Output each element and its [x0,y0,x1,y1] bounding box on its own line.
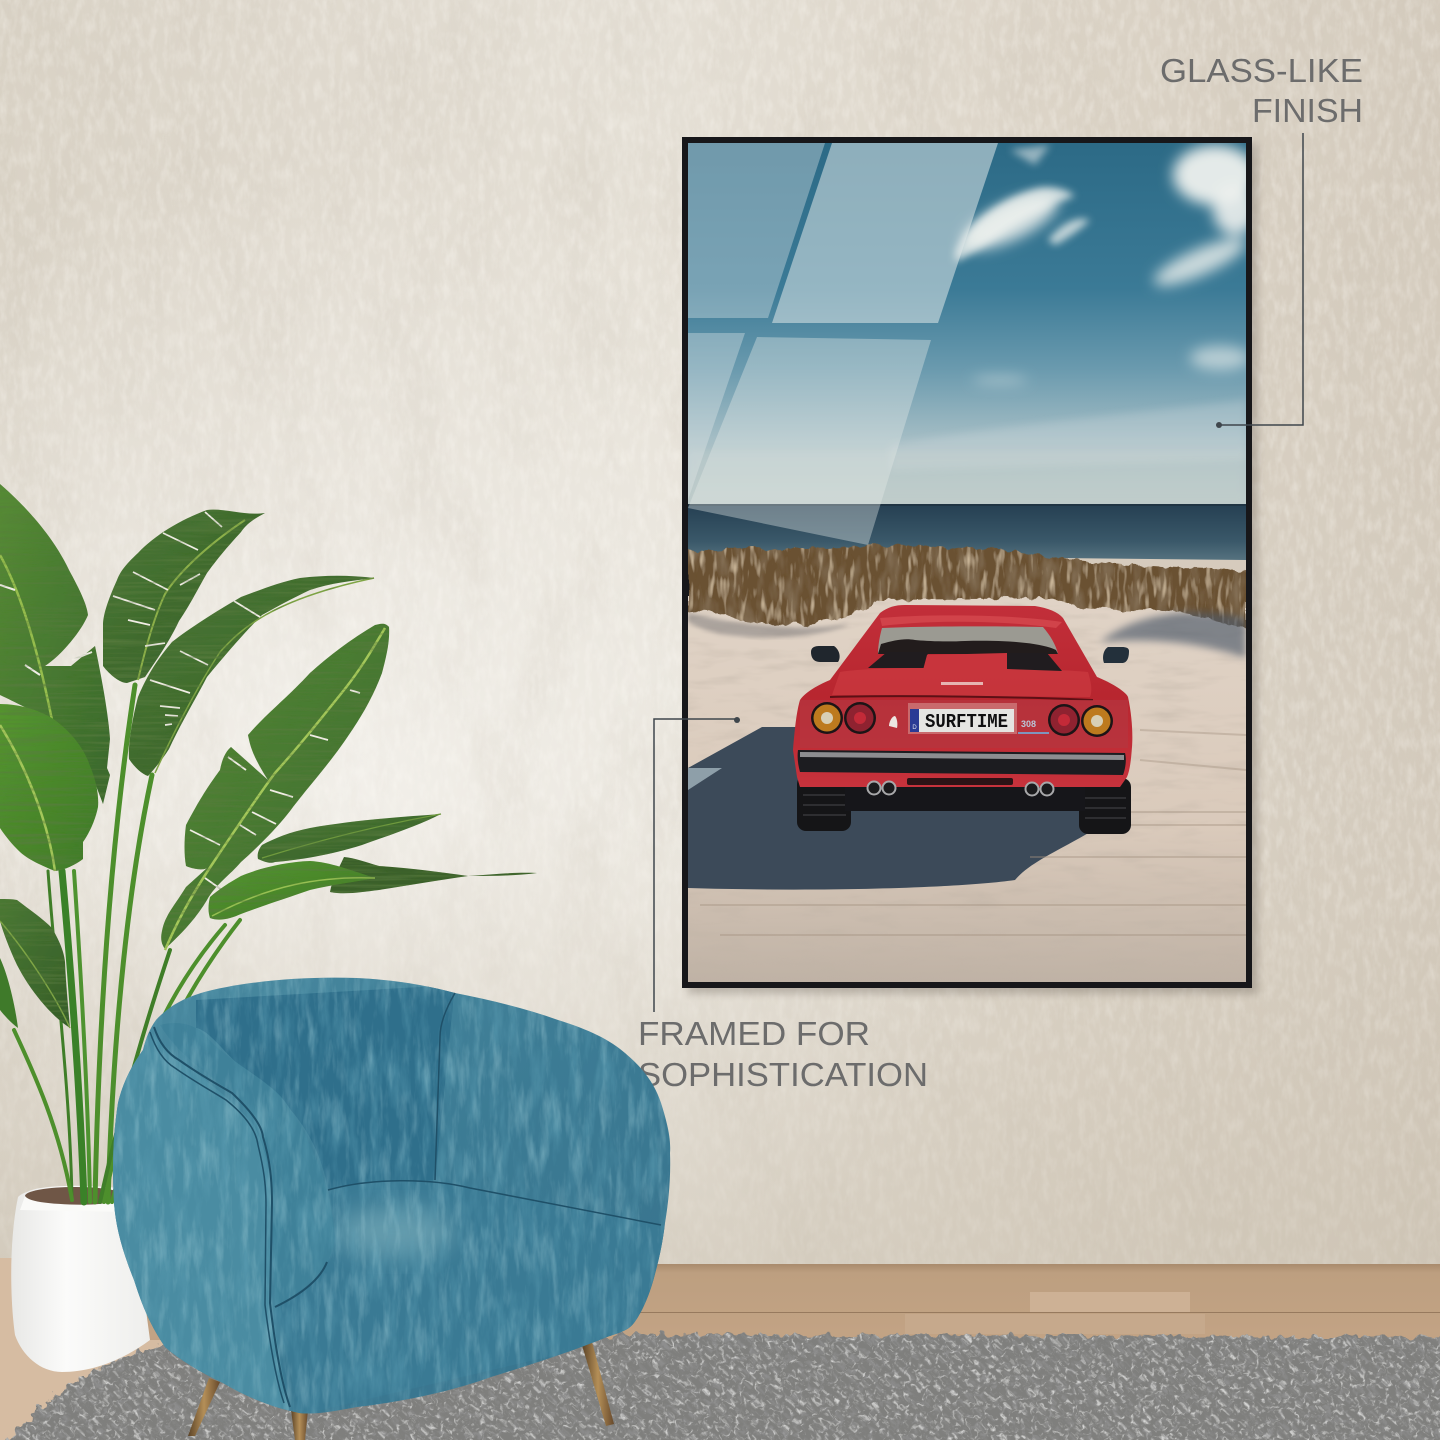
bumper [798,750,1126,775]
car shadow on sand [688,727,1090,890]
callout label: FRAMED FOR [638,1015,870,1052]
exhausts [868,782,1054,796]
deck lip [830,696,1093,700]
chair arm front [100,1030,290,1415]
sea [688,506,1246,560]
chair seat [275,1181,665,1415]
licence plate: D [912,725,917,731]
roof highlight [880,615,1062,628]
deck highlight [832,668,1091,697]
callout label: GLASS-LIKE [1160,52,1363,89]
leaf: front low [208,861,375,920]
sand dunes [688,596,1246,982]
leaf: bottom left [0,899,70,1028]
callout: framed for sophistication [638,717,928,1093]
distant beach strip [1064,558,1246,573]
horizon haze [698,454,1242,476]
window reflections [688,143,998,545]
chair back interior [196,985,455,1190]
callout: glass-like finish [1160,52,1363,428]
chair piping and seams [150,993,661,1407]
black frame [682,137,1252,988]
leader line [654,719,737,1012]
horse emblem [889,716,897,728]
dune shadow [1100,612,1246,658]
leaf: second from top [103,510,265,683]
badge [941,682,983,685]
leaf: top left [0,484,110,804]
leaf: bottom left small [0,958,18,1028]
clouds [890,145,1257,470]
leaf: large diagonal [161,624,389,950]
blue velvet armchair [100,970,680,1420]
callout label: SOPHISTICATION [638,1056,928,1093]
sky [688,143,1246,507]
stems [14,685,240,1202]
dune grass [688,545,1246,628]
grey shag rug [0,1330,1440,1440]
leaf: third [129,576,374,776]
chair shading and texture [100,970,680,1420]
white pot [11,1186,150,1372]
red sports car [793,605,1132,834]
leaf: lower left bright [0,704,98,871]
licence plate: SURFTIME [925,711,1008,733]
lower vent [907,778,1013,785]
tail lights [811,702,1113,737]
gold chair legs [188,1342,614,1440]
rear window [878,626,1058,654]
framed poster [682,137,1258,994]
poster artwork [688,143,1257,982]
leaf: upper right low [258,814,441,863]
callout label: FINISH [1252,92,1363,129]
tyres [797,775,851,831]
model badge: 308 [1021,719,1036,729]
wall shadow of frame [688,144,1258,994]
engine louvres [868,652,928,668]
rear fascia [800,700,1128,748]
body [793,605,1132,787]
seat highlight [335,1206,455,1258]
leaf: long right low [330,857,537,893]
mirrors [811,646,840,662]
raised engine cover [923,653,1007,670]
leader line [1219,133,1303,425]
licence plate [908,703,1017,734]
tyre tracks [700,730,1246,935]
chair body [113,978,670,1414]
callout label [638,1015,928,1093]
chair arm top [160,1023,335,1307]
callout label [1160,52,1363,129]
undercarriage [845,785,1085,811]
plant [0,484,537,1372]
wood floor [0,1258,1440,1440]
